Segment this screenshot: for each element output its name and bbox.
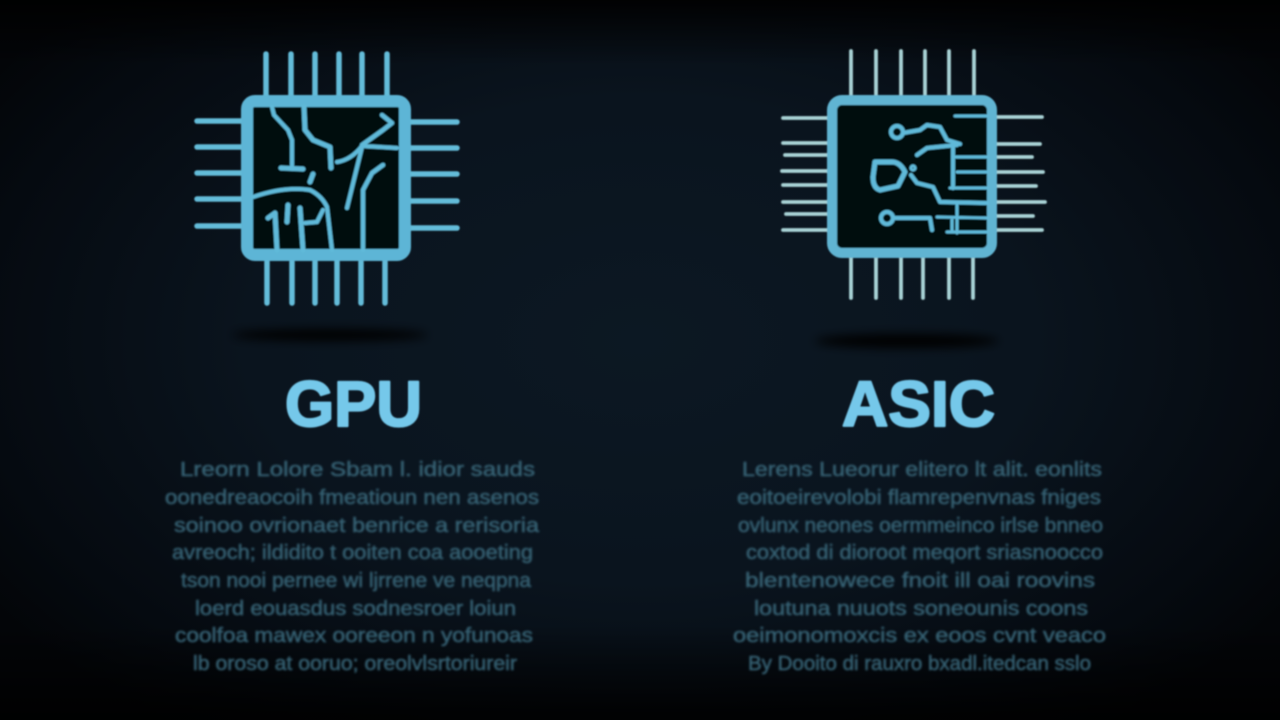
ASIC chip shadow [815,334,999,348]
text block: ASIC description: ovlunx neones oermmeinco irlse bnneo [738,515,1103,537]
text block: GPU description: soinoo ovrionaet benrice a rerisoria [174,515,540,537]
ASIC chip pins [782,51,1045,298]
text block: ASIC description [733,459,1106,675]
text block: ASIC description: By Dooito di rauxro bxadl.itedcan sslo [748,653,1091,675]
text block: ASIC description: Lerens Lueorur elitero lt alit. eonlits [742,459,1102,481]
GPU chip shadow [232,329,428,341]
text block: ASIC description: coxtod di dioroot meqort sriasnoocco [746,542,1103,564]
text block: GPU description: loerd eouasdus sodnesroer loiun [195,598,516,620]
text block: GPU description: coolfoa mawex ooreeon n yofunoas [175,625,533,647]
text block: ASIC description: oeimonomoxcis ex eoos cvnt veaco [733,625,1106,647]
text block: ASIC description: blentenowece fnoit ill oai roovins [745,570,1095,592]
text block: GPU description: lb oroso at ooruo; oreolvlsrtoriureir [193,653,517,675]
heading: ASIC: ASIC [842,368,995,440]
text block: GPU description: tson nooi pernee wi ljrrene ve neqpna [181,570,532,592]
text block: GPU description: avreoch; ildidito t ooiten coa aooeting [172,542,533,564]
ASIC chip body [832,100,992,253]
GPU chip body [247,101,405,255]
heading: GPU: GPU [285,368,422,440]
GPU chip pins [197,54,457,303]
icon: ASIC chip [782,51,1045,298]
icon: GPU chip [197,54,457,303]
GPU chip circuit traces [253,107,397,250]
text block: GPU description: oonedreaocoih fmeatioun nen asenos [165,487,539,509]
text block: ASIC description: eoitoeirevolobi flamrepenvnas fniges [737,487,1101,509]
text block: GPU description: Lreorn Lolore Sbam l. idior sauds [180,459,535,481]
text block: ASIC description: loutuna nuuots soneounis coons [754,598,1088,620]
text block: GPU description [165,459,540,675]
ASIC chip circuit traces [873,116,987,233]
